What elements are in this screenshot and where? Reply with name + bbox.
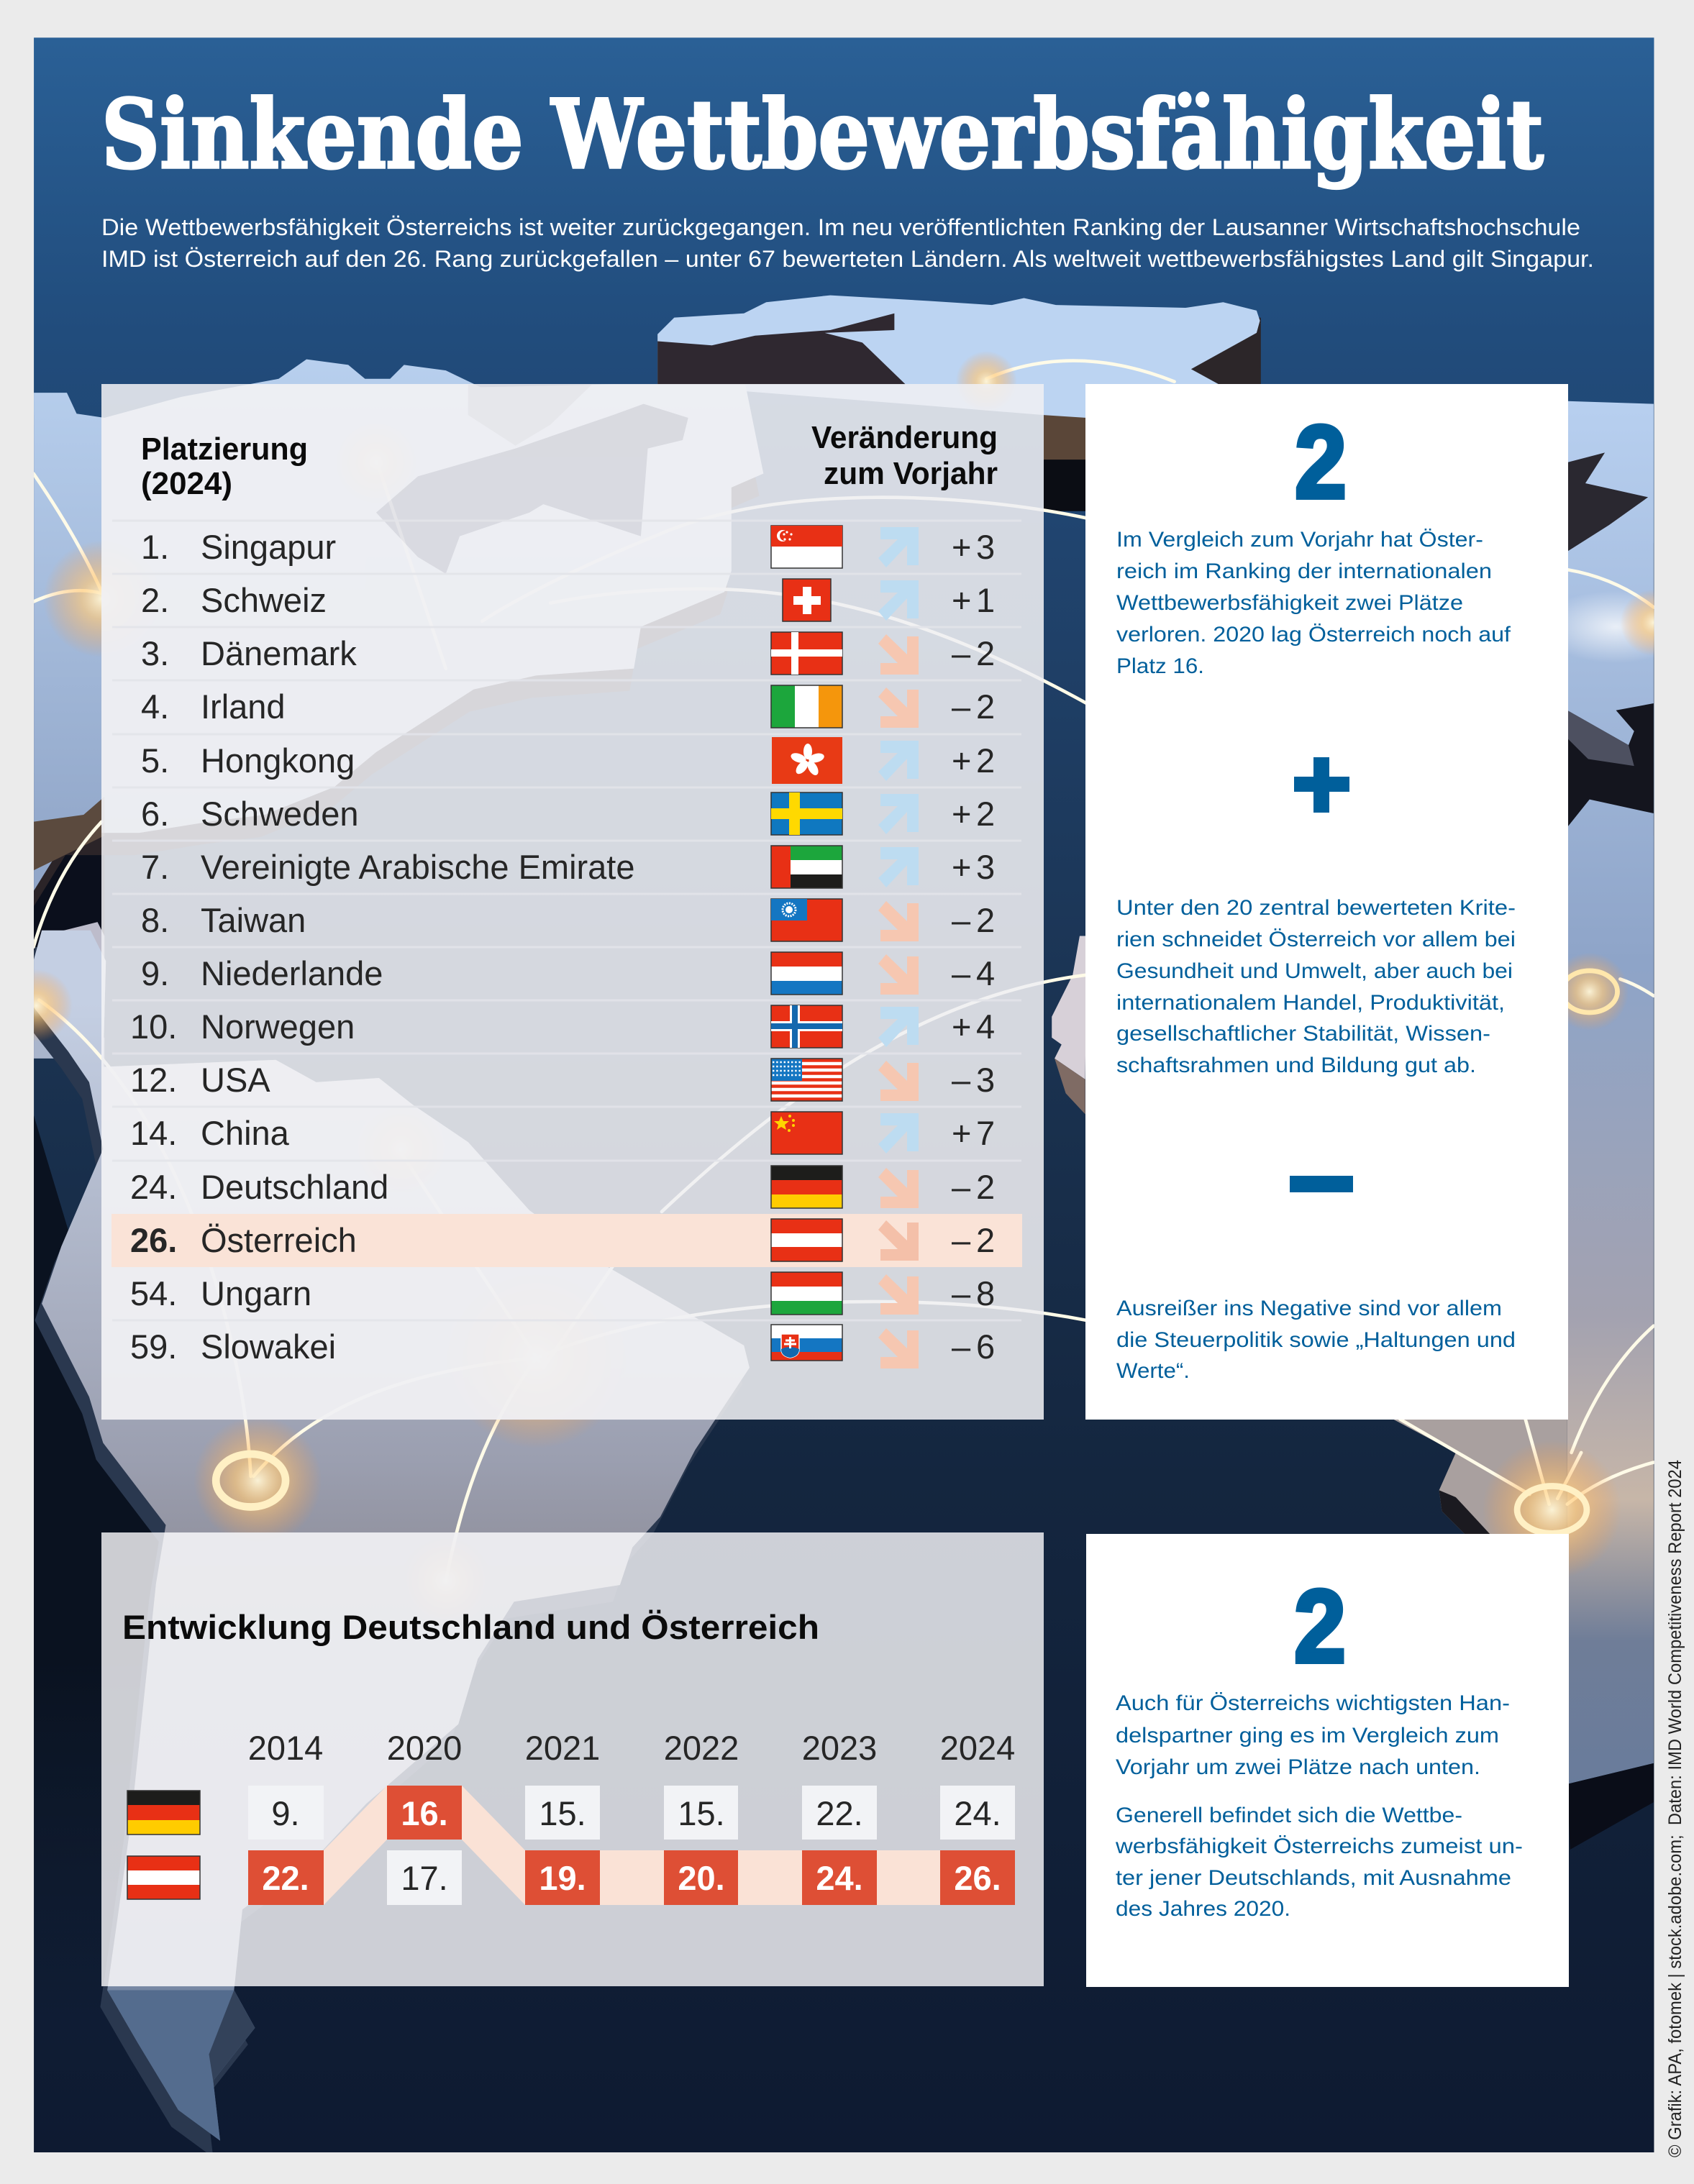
text block: strengths: gesellschaftlicher Stabilität, Wissen- [1116,1022,1490,1046]
icon: minus [1290,1176,1353,1192]
flag: USA [771,1059,842,1101]
year labels: 2022 [664,1729,739,1767]
text block: two places lost: reich im Ranking der internationalen [1116,559,1492,583]
big number 2: 2 [1294,1568,1346,1684]
row: Dänemark [141,632,995,675]
text block: weaknesses: Werte“. [1116,1359,1190,1383]
row: Österreich: 2 [976,1221,995,1259]
connecting bands for Austria/Germany lower rank [324,1786,940,1905]
panel: development Germany and Austria [101,1532,1044,1986]
row: Ungarn: Ungarn [201,1274,311,1312]
row: Schweiz: 1 [976,581,995,619]
row: Taiwan: – [952,901,970,939]
rank boxes Austria: 19. [539,1859,586,1897]
panel: white box trade partner [1086,1534,1569,1987]
row: Norwegen: Norwegen [201,1008,355,1046]
row: Niederlande: 9. [141,954,169,992]
row: Schweiz: Schweiz [201,581,327,619]
year labels [248,1729,1015,1767]
rank boxes Germany: 15. [539,1794,586,1832]
row: Irland: – [952,687,970,726]
row: Schweden: 6. [141,795,169,833]
rank boxes Austria [248,1850,1015,1905]
row: Schweden: + [952,795,971,833]
year labels: 2020 [387,1729,462,1767]
text block: two places lost [1116,528,1511,678]
text block: two places lost: Wettbewerbsfähigkeit zwei Plätze [1116,591,1463,615]
row: Taiwan: 2 [976,901,995,939]
column heading: Veränderung zum Vorjahr [811,420,998,491]
row: Niederlande: 4 [976,954,995,992]
row: China: + [952,1114,971,1152]
row: USA: 12. [130,1061,177,1099]
row: Irland: 4. [141,687,169,726]
row: Taiwan: Taiwan [201,901,306,939]
flag: Taiwan [771,899,842,941]
chart heading: Entwicklung Deutschland und Österreich [122,1608,819,1646]
row: USA: – [952,1061,970,1099]
network arcs [33,361,1654,1581]
row: Dänemark: 3. [141,634,169,672]
row: Hongkong: Hongkong [201,741,355,780]
rank boxes Germany: 24. [954,1794,1001,1832]
text block: strengths: Unter den 20 zentral bewerteten Krite- [1116,896,1516,920]
row: Österreich: 26. [130,1221,177,1259]
row: Irland: Irland [201,687,286,726]
text block: weaknesses: Ausreißer ins Negative sind vor allem [1116,1297,1502,1320]
row: Hongkong [141,737,995,784]
text block: weaknesses [1116,1297,1516,1383]
flag: Ireland [771,685,842,728]
rank boxes Germany: 22. [816,1794,863,1832]
land: large northern continent [29,382,760,913]
row: Ungarn [130,1272,995,1315]
row: Schweden [141,792,995,835]
row: Vereinigte Arabische Emirate: + [952,848,971,886]
row: Österreich [130,1219,995,1261]
row: Singapur: Singapur [201,528,336,566]
year labels: 2024 [940,1729,1015,1767]
row: USA: 3 [976,1061,995,1099]
flag: Austria [771,1219,842,1261]
row: Norwegen: + [952,1008,971,1046]
row: Slowakei: 59. [130,1328,177,1366]
text block: strengths: schaftsrahmen und Bildung gut ab. [1116,1054,1476,1077]
row: USA [130,1059,995,1101]
row: Irland [141,685,995,728]
flag: Hungary [771,1272,842,1315]
rank boxes Austria: 22. [262,1859,309,1897]
row: Schweiz: 2. [141,581,169,619]
rank boxes Austria: 26. [954,1859,1001,1897]
row: Deutschland: 2 [976,1168,995,1206]
flag: Norway [771,1005,842,1048]
flag: Switzerland [783,579,831,621]
rank boxes Germany: 16. [401,1794,448,1832]
land: small central islands [63,922,105,958]
land: right edge continent [1567,401,1654,1784]
panel: ranking table [101,384,1044,1420]
row: Norwegen: 4 [976,1008,995,1046]
intro text: Die Wettbewerbsfähigkeit Österreichs ist weiter zurückgegangen. Im neu veröffentlichten Ranking der Lausanner Wirtschaftshochschule [101,214,1580,240]
row: Schweiz [141,579,995,621]
row: Singapur: 1. [141,528,169,566]
flag: Netherlands [771,952,842,995]
row: Norwegen [130,1005,995,1048]
row: Slowakei: 6 [976,1328,995,1366]
rank boxes Germany [248,1786,1015,1840]
text block: two places lost: Im Vergleich zum Vorjahr hat Öster- [1116,528,1483,552]
column heading: Platzierung [141,431,308,501]
row: Dänemark: 2 [976,634,995,672]
row: Ungarn: – [952,1274,970,1312]
flag: Sweden [771,792,842,835]
rank boxes Germany: 15. [678,1794,725,1832]
row: Deutschland: Deutschland [201,1168,388,1206]
row: China: 7 [976,1114,995,1152]
row: China [130,1112,995,1154]
rank boxes Austria: 20. [678,1859,725,1897]
big number 2: 2 [1295,404,1347,520]
row: Taiwan [141,899,995,941]
text block: trade partner: delspartner ging es im Vergleich zum [1116,1724,1499,1747]
text block: generally below Germany [1115,1804,1523,1921]
row: Irland: 2 [976,687,995,726]
row: Vereinigte Arabische Emirate: Vereinigte Arabische Emirate [201,848,634,886]
row: Vereinigte Arabische Emirate: 3 [976,848,995,886]
text block: strengths: internationalem Handel, Produktivität, [1116,991,1505,1015]
row: Ungarn: 54. [130,1274,177,1312]
text block: weaknesses: die Steuerpolitik sowie „Haltungen und [1116,1328,1516,1352]
flag: Germany [127,1791,200,1835]
row: Slowakei [130,1325,995,1369]
column heading: Veränderung zum Vorjahr: Veränderung [811,420,998,455]
row: China: 14. [130,1114,177,1152]
row: Taiwan: 8. [141,901,169,939]
year labels: 2023 [802,1729,877,1767]
row: Dänemark: – [952,634,970,672]
highlight: Austria row [111,1214,1022,1267]
flag: Denmark [771,632,842,675]
row: Vereinigte Arabische Emirate: 7. [141,848,169,886]
rank boxes Austria: 24. [816,1859,863,1897]
row: Singapur: + [952,528,971,566]
text block: strengths: rien schneidet Österreich vor allem bei [1116,928,1516,951]
brightened land seen through panels [101,384,715,1986]
row: Deutschland: 24. [130,1168,177,1206]
flag: Singapore [771,526,842,568]
row: Norwegen: 10. [130,1008,177,1046]
text block: two places lost: Platz 16. [1116,654,1204,678]
text block: strengths: Gesundheit und Umwelt, aber auch bei [1116,959,1513,983]
text block: two places lost: verloren. 2020 lag Österreich noch auf [1116,623,1511,646]
row: Niederlande: Niederlande [201,954,383,992]
row: USA: USA [201,1061,270,1099]
intro text: IMD ist Österreich auf den 26. Rang zurückgefallen – unter 67 bewerteten Ländern. Als weltweit wettbewerbsfähigstes Land gilt Singapur. [101,246,1594,272]
year labels: 2021 [525,1729,600,1767]
column heading: Platzierung: Platzierung [141,431,308,467]
row: Deutschland [130,1166,995,1208]
row: Singapur [141,526,995,568]
column heading: Platzierung: (2024) [141,466,232,501]
row: Österreich: – [952,1221,970,1259]
text block: trade partner [1116,1691,1510,1779]
row: Schweden: Schweden [201,795,358,833]
row: Niederlande: – [952,954,970,992]
flag: Germany [771,1166,842,1208]
flag: Hong Kong [772,737,842,784]
flag: United Arab Emirates [771,846,842,888]
flag: Slovakia [771,1325,842,1361]
glowing network nodes [0,351,1687,1625]
text block: generally below Germany: Generell befindet sich die Wettbe- [1116,1804,1462,1827]
row: Dänemark: Dänemark [201,634,357,672]
text block: generally below Germany: werbsfähigkeit Österreichs zumeist un- [1115,1835,1523,1858]
dark shadow areas on lower sea [34,855,101,958]
text block: trade partner: Auch für Österreichs wichtigsten Han- [1116,1691,1510,1715]
row: Niederlande [141,952,995,995]
rank boxes Austria: 17. [401,1859,448,1897]
text block: trade partner: Vorjahr um zwei Plätze nach unten. [1116,1755,1480,1779]
column heading: Veränderung zum Vorjahr: zum Vorjahr [824,456,998,491]
land: south continent [27,947,742,2157]
row: Slowakei: – [952,1328,970,1366]
row: Hongkong: 5. [141,741,169,780]
row: Ungarn: 8 [976,1274,995,1312]
row: China: China [201,1114,290,1152]
text block: generally below Germany: des Jahres 2020. [1116,1897,1290,1921]
row: Hongkong: + [952,741,971,780]
rank boxes Germany: 9. [271,1794,300,1832]
flag: China [771,1112,842,1154]
row: Hongkong: 2 [976,741,995,780]
panel: white box summary [1085,384,1568,1420]
flag: Austria [127,1856,200,1899]
row: Schweiz: + [952,581,971,619]
row: Deutschland: – [952,1168,970,1206]
icon: plus [1294,757,1349,813]
text block: generally below Germany: ter jener Deutschlands, mit Ausnahme [1116,1866,1511,1890]
intro text [101,214,1594,272]
land: top north part [657,296,1261,418]
row: Slowakei: Slowakei [201,1328,336,1366]
row: Österreich: Österreich [201,1221,357,1259]
year labels: 2014 [248,1729,323,1767]
row: Vereinigte Arabische Emirate [141,846,995,888]
source credit: © Grafik: APA, fotomek | stock.adobe.com; Daten: IMD World Competitiveness Report 2024 [1665,1460,1685,2157]
row: Schweden: 2 [976,795,995,833]
text block: strengths [1116,896,1516,1077]
row: Singapur: 3 [976,528,995,566]
